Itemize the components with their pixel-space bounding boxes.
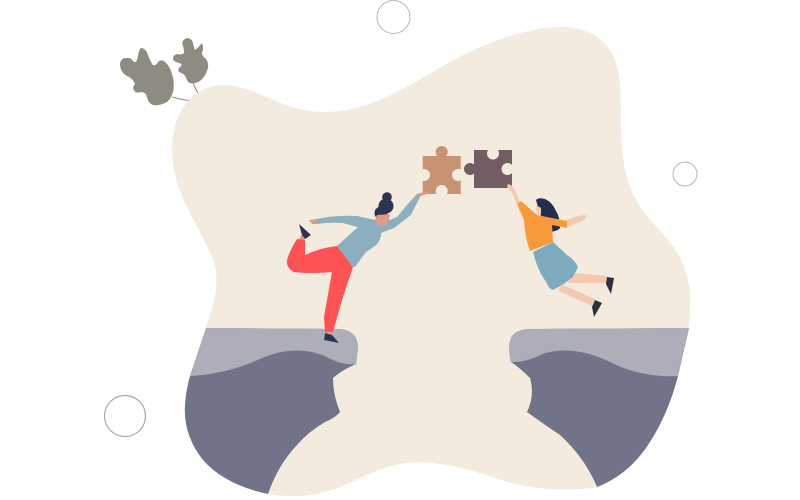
hair [536,198,560,232]
person: woman on left cliff [287,191,429,343]
top [517,201,567,251]
circle: right ring [673,162,697,186]
shoe raised [299,224,311,239]
outstretched arm [566,215,586,227]
face [375,214,390,226]
cliff rock face [509,328,689,487]
shoes [592,277,614,317]
shirt [316,194,420,267]
skirt [533,242,578,290]
puzzle piece: left tan [418,146,464,197]
legs [557,273,607,306]
raised arm [507,184,520,204]
hands [309,191,429,224]
background blob [172,27,690,496]
face [536,205,541,214]
icon: leaves [120,38,208,105]
cliff top surface [190,328,358,376]
shoe standing [324,333,339,343]
circle: top ring [377,0,410,34]
puzzle piece: right brown [464,148,514,188]
ankles [299,234,333,336]
hair [374,192,394,220]
cliff rock face [185,328,358,494]
circle: bottom-left ring [104,396,146,436]
right cliff [509,328,689,487]
left cliff [185,328,358,494]
cliff top surface [509,328,689,376]
pants [287,239,353,332]
person: woman jumping on right [507,184,614,317]
